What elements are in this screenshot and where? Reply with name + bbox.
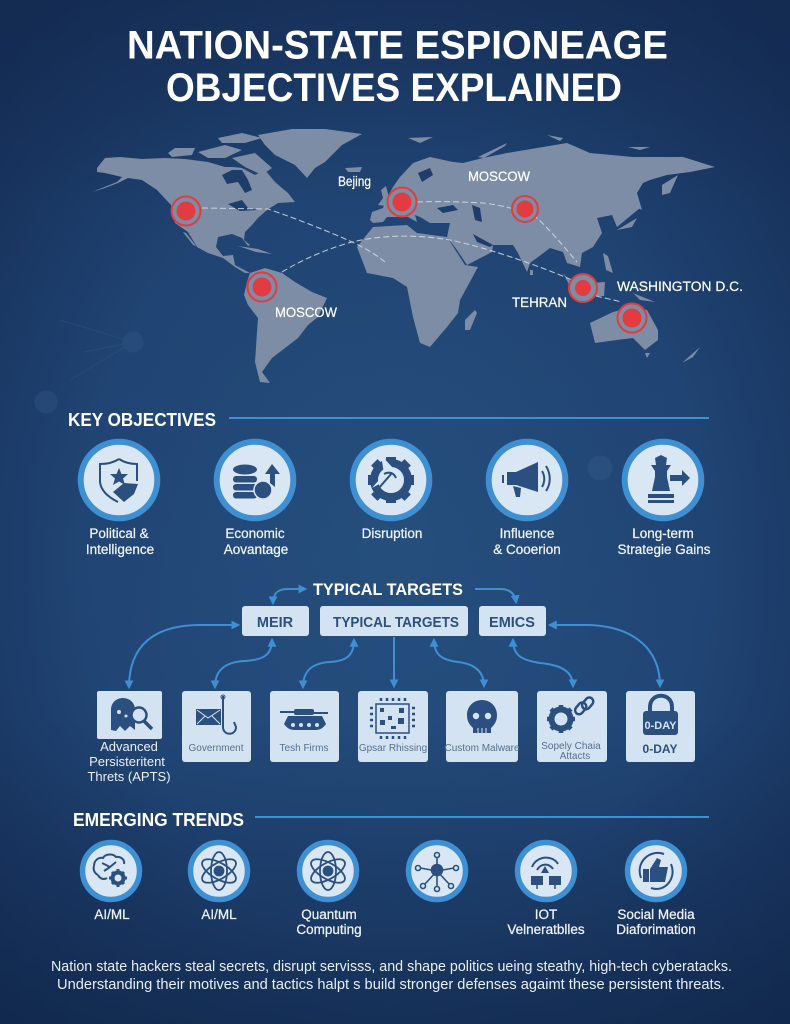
box: EMICS [479,606,546,636]
label: persistent threats [87,754,171,784]
objective: long-term strategic gains [625,442,701,541]
label: disinformation: Diaforimation [616,922,696,937]
map: Madagascar [465,310,477,330]
marker: Europe [388,188,416,216]
icon: ghost with magnifier [111,698,152,731]
card: advanced persistent threats [97,691,162,754]
label: Advanced [100,739,158,754]
label: vulnerabilities: Velneratblles [507,922,585,937]
map labels: MOSCOW [275,305,337,320]
icon: shield with star and handshake [100,459,138,502]
card: custom malware [444,691,520,762]
box: EMICS: EMICS [489,615,535,631]
icon: connected devices [531,858,561,889]
map: Eurasia [370,143,715,272]
map: Baltic and inland seas [418,168,493,247]
icon: envelope and hook [196,695,236,734]
card: spear phishing [358,691,428,762]
label: Political & [89,526,149,541]
map labels: WASHINGTON D.C. [617,279,743,294]
label: Attacts [560,751,590,762]
card: supply chain attacks [537,691,607,762]
label: Gpsar Rhissing [359,743,427,754]
trend: quantum computing [300,842,357,922]
label: advantage: Aovantage [224,542,288,557]
card: tech firms [270,691,339,762]
label: Economic [225,526,285,541]
icon: network hub [416,852,458,892]
trend: network [408,842,466,900]
icon: tank [280,709,328,730]
map: South America [244,268,327,383]
icon: chess king and arrow [648,455,690,503]
objective: influence and coercion [489,442,565,541]
map: Greenland [258,129,362,178]
label: Quantum [301,907,357,922]
title: NATION-STATE ESPIONEAGE [127,24,668,68]
box: typical targets [320,606,468,636]
marker: west USA [172,196,200,226]
box: MEIR [242,606,309,636]
map labels: Bejing [338,174,371,189]
label [541,741,601,762]
label: coercion: & Cooerion [493,542,561,557]
objective: disruption [353,442,429,541]
heading: key objectives: KEY OBJECTIVES [68,410,216,430]
label: Influence [500,526,554,541]
label: Social Media [617,907,695,922]
marker: South America [248,272,276,302]
icon: megaphone [503,462,550,497]
label: Sopely Chaia [541,741,601,752]
box: typical targets: TYPICAL TARGETS [333,615,459,631]
icon: gear and chain [547,696,595,733]
trend: social media disinformation [617,842,695,922]
icon: microchip [370,698,415,739]
label: Tesh Firms [280,743,328,754]
map labels: MOSCOW [468,169,530,184]
label: AI/ML [94,907,130,922]
label: 0-DAY [643,742,677,756]
label: computing: Computing [296,922,362,937]
map: North America [92,133,295,273]
marker: Southeast Asia [569,274,597,302]
footer text [51,959,732,993]
map: Islands [408,135,700,363]
heading: typical targets: TYPICAL TARGETS [313,580,463,599]
trend: AI/ML brain gear [82,842,140,922]
label: strategic gains: Strategie Gains [617,542,711,557]
label: intelligence: Intelligence [86,542,154,557]
marker: central Asia [512,196,538,222]
title: OBJECTIVES EXPLAINED [166,66,622,110]
label: persistent threats: Persisteritent [89,754,165,769]
icon: coins and arrow [233,464,280,499]
heading: emerging trends: EMERGING TRENDS [73,810,244,830]
label: Custom Malware [444,743,520,754]
map labels: TEHRAN [512,295,567,310]
map labels [275,169,743,320]
objective: economic advantage [217,442,293,541]
map: Africa [357,225,478,347]
icon: atom [308,852,348,890]
label: AI/ML [201,907,237,922]
map: Australia [590,307,658,350]
trend: AI/ML atom [190,842,248,922]
card: government [182,691,251,762]
marker: Australia [618,304,646,332]
label: Government [188,743,244,754]
map: Iceland and UK [345,167,389,206]
icon: padlock: 0-DAY [644,720,677,732]
objective: political and intelligence [81,442,157,541]
card: zero day [626,691,695,762]
world map [92,129,743,383]
footer text: Understanding their motives and tactics halpt s build stronger defenses agaimt these persistent threats. [57,977,725,993]
label: IOT [535,907,557,922]
icon: brain and gear [94,854,127,887]
icon: thumbs up with cycle arrow [640,853,673,889]
map: Hudson Bay [222,170,252,193]
icon: broken gear [368,455,414,503]
trend: IoT vulnerabilities [518,842,574,922]
label: Disruption [362,526,422,541]
icon: atom [199,852,239,890]
map: dashed connections [202,202,622,302]
arrows: target network [129,589,660,687]
box: MEIR: MEIR [257,615,294,631]
label: Long-term [632,526,694,541]
title [127,24,668,110]
map: Great Lakes [228,200,258,211]
label: persistent threats: Threts (APTS) [87,769,171,784]
icon: skull [467,700,497,733]
footer text: Nation state hackers steal secrets, disrupt servisss, and shape politics ueing steathy, high-tech cyberatacks. [51,959,732,975]
